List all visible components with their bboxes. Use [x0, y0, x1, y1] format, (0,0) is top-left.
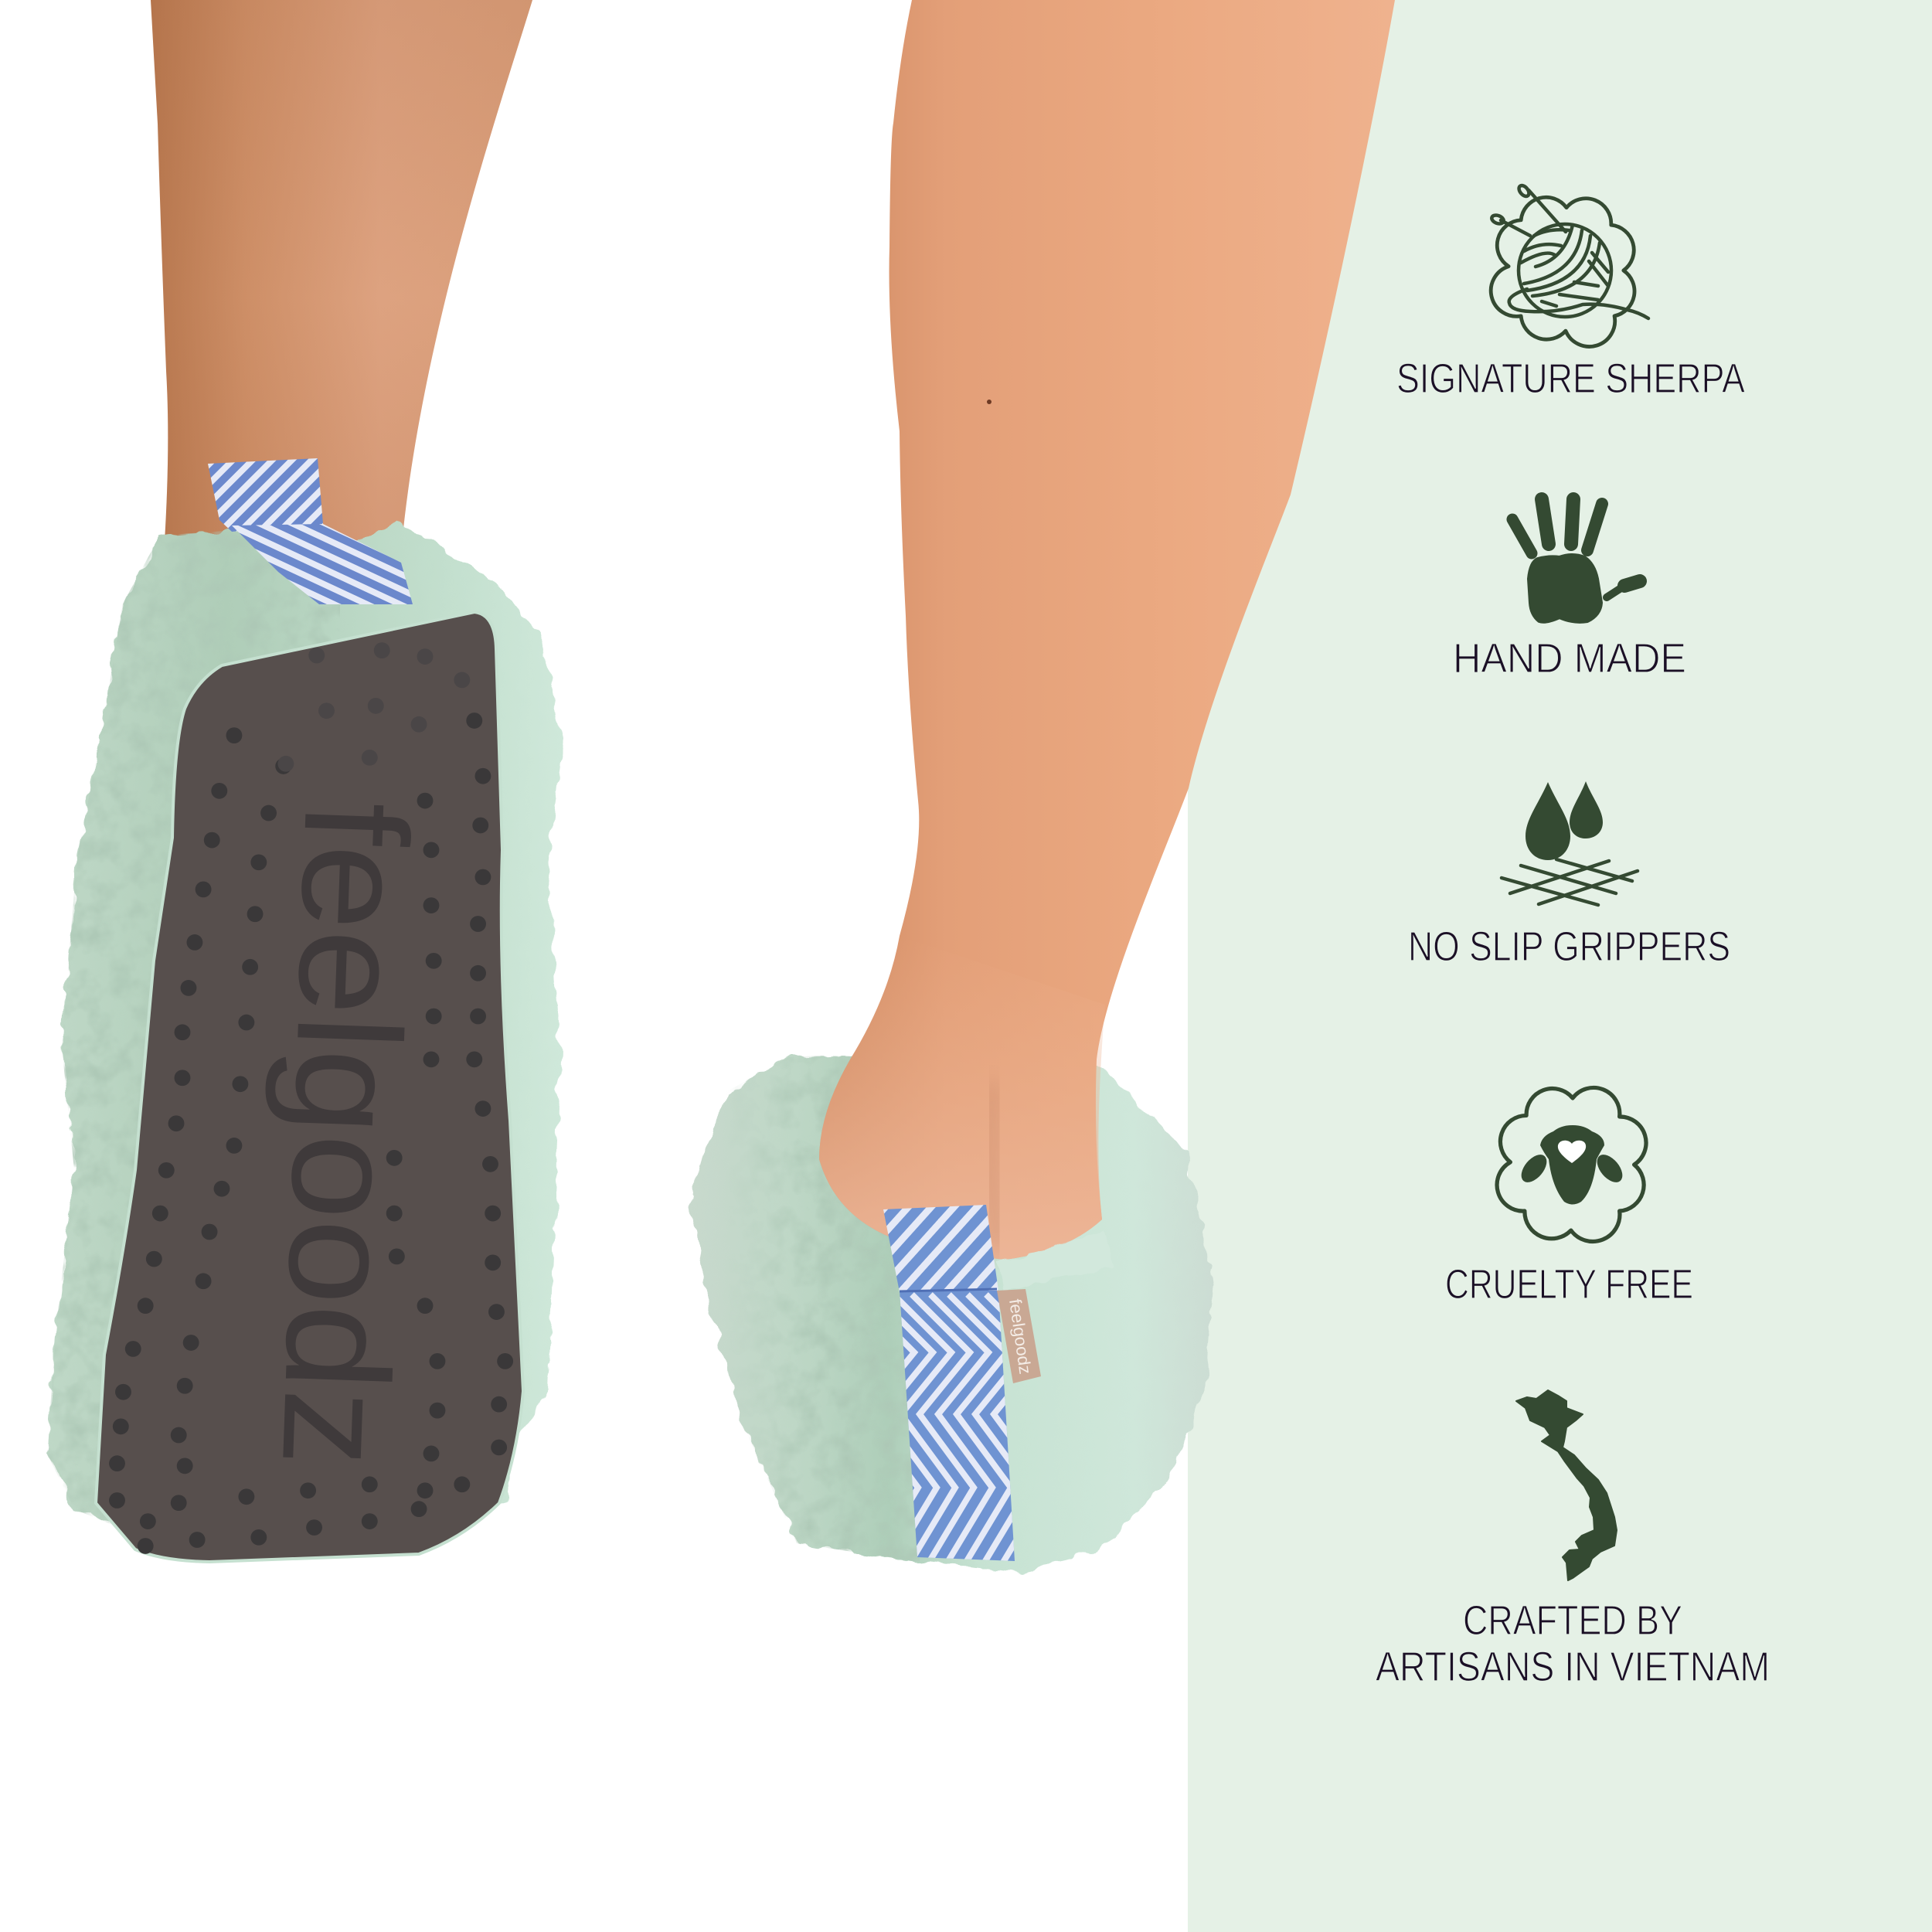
label: CRUELTY FREE [1445, 1261, 1693, 1308]
photo: right slipper fur [680, 1043, 1213, 1577]
photo: right leg [819, 0, 1395, 1260]
label line 1: CRAFTED BY [1463, 1597, 1682, 1644]
icon: hand print [1512, 499, 1640, 621]
sole logo text: feelgoodz [251, 800, 438, 1469]
left slipper sherpa fur [47, 519, 563, 1562]
photo: slipper brand tag [997, 1289, 1041, 1383]
feature: hand made [1453, 499, 1686, 682]
label: NO SLIP GRIPPERS [1408, 923, 1730, 970]
left slipper grey sole [96, 612, 523, 1562]
photo: left slipper seen from below [31, 458, 563, 1569]
panel: features background [1188, 0, 1932, 1932]
icon: water drops over mesh [1502, 781, 1638, 905]
icon: yarn ball in cloud [1491, 184, 1648, 346]
feature: no slip grippers [1408, 781, 1730, 970]
label: SIGNATURE SHERPA [1396, 355, 1745, 402]
left slipper ribbon tab [208, 458, 413, 604]
photo: right slipper rim in front of the heel [998, 1229, 1113, 1291]
sole gripper dots [117, 651, 505, 1546]
photo: left leg [151, 0, 532, 595]
icon: map of Vietnam [1516, 1390, 1617, 1580]
photo: slipper brand tag: feelgoodz [1005, 1298, 1035, 1376]
feature: signature sherpa [1396, 184, 1745, 402]
icon: sheep in cloud [1497, 1087, 1646, 1241]
feature: cruelty free [1445, 1087, 1693, 1308]
feature: crafted by artisans in vietnam [1376, 1390, 1770, 1690]
photo: right slipper ribbon [883, 1205, 1015, 1561]
label: HAND MADE [1453, 635, 1686, 682]
label line 2: ARTISANS IN VIETNAM [1376, 1644, 1770, 1690]
